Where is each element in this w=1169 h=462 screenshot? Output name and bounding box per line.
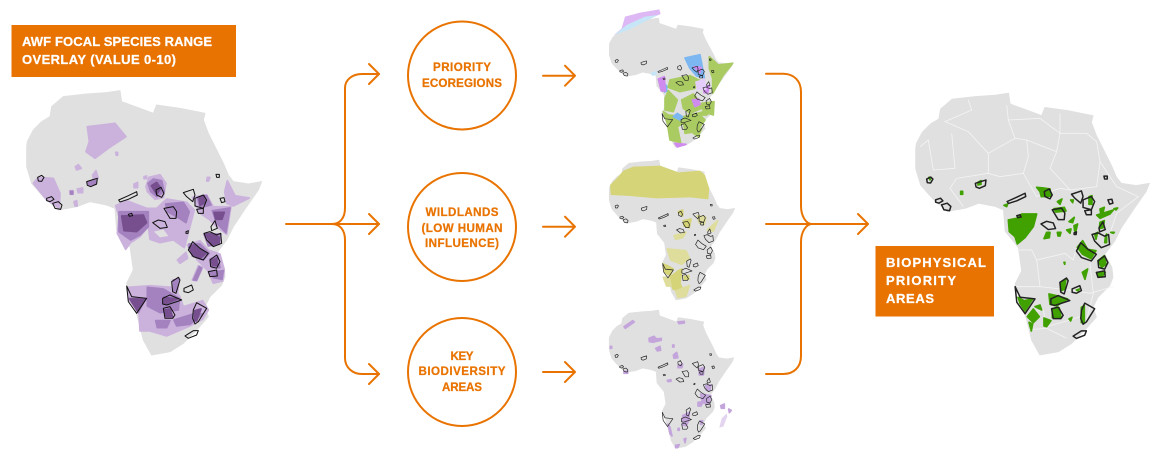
circle: wildlands: [408, 173, 516, 281]
country borders: [920, 100, 1138, 338]
heading box: biophysical priority areas: BIOPHYSICAL: [886, 255, 986, 270]
circle: key biodiversity areas: AREAS: [442, 381, 482, 394]
heading box: AWF focal species range overlay: [12, 25, 236, 77]
circle: priority ecoregions: ECOREGIONS: [422, 77, 502, 90]
circle: key biodiversity areas: [408, 318, 516, 426]
circle: wildlands: (LOW HUMAN: [422, 222, 502, 235]
circle: wildlands: INFLUENCE): [425, 237, 499, 250]
heading box: AWF focal species range overlay: AWF FOCAL SPECIES RANGE: [22, 34, 212, 49]
circle: wildlands: WILDLANDS: [426, 206, 499, 219]
connector: right merging arrows: [766, 74, 868, 374]
arrows: circles to maps: [543, 66, 575, 382]
map: priority ecoregions: [609, 9, 733, 147]
heading box: biophysical priority areas: [876, 246, 994, 316]
circle: priority ecoregions: PRIORITY: [433, 61, 491, 74]
heading box: AWF focal species range overlay: OVERLAY (VALUE 0-10): [22, 52, 176, 67]
map: focal species range overlay: [27, 91, 262, 355]
map: key biodiversity areas: [609, 310, 734, 448]
circle: key biodiversity areas: KEY: [450, 350, 474, 363]
heading box: biophysical priority areas: AREAS: [886, 291, 934, 306]
connector: left branching arrows: [286, 64, 379, 384]
map: biophysical priority areas: [916, 93, 1149, 355]
circle: key biodiversity areas: BIODIVERSITY: [418, 365, 506, 378]
circle: priority ecoregions: [408, 22, 516, 130]
heading box: biophysical priority areas: PRIORITY: [886, 273, 956, 288]
map: wildlands: [609, 160, 735, 300]
